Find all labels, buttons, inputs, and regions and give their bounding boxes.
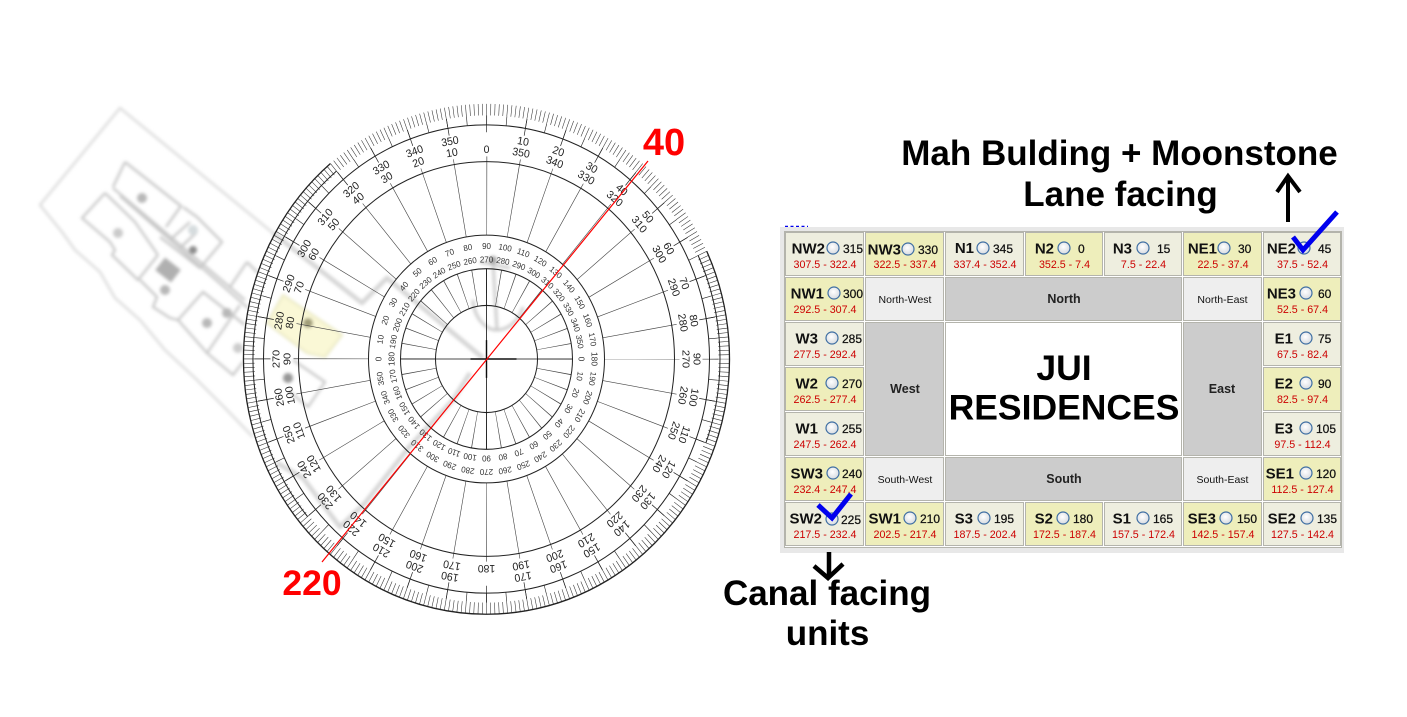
cell: NE3: NE3: [1267, 286, 1296, 302]
protractor degree labels: 340: [544, 154, 565, 172]
cell: S3: 187.5 - 202.4: [954, 529, 1017, 541]
protractor degree labels: 80: [284, 316, 297, 330]
cell: NE3: 60: [1318, 287, 1332, 301]
cell: N3: N3: [1113, 240, 1132, 258]
cell: centre title JUI RESIDENCES: [946, 322, 1182, 456]
cell: NW2: [786, 232, 864, 276]
cell: NE3: 52.5 - 67.4: [1277, 304, 1328, 316]
protractor degree labels: 220: [604, 508, 625, 530]
cell: NW2: 315: [843, 242, 863, 256]
protractor degree labels: 30: [379, 170, 395, 186]
protractor degree labels: 340: [404, 143, 425, 161]
protractor degree labels: 10: [376, 334, 386, 345]
protractor degree labels: 160: [548, 557, 569, 575]
table frame: [780, 227, 1344, 553]
protractor degree labels: 320: [341, 180, 362, 201]
heading: main building and Moonstone Lane facing: Mah Bulding + Moonstone: [901, 134, 1338, 173]
cell: W3: W3: [796, 330, 818, 348]
protractor degree labels: 200: [404, 557, 425, 575]
protractor degree labels: 150: [572, 294, 587, 311]
protractor degree labels: 110: [675, 424, 692, 445]
clipped text at table top: [785, 226, 808, 228]
ten degree ticks: [262, 124, 710, 594]
cell: centre title JUI RESIDENCES: JUI: [1036, 348, 1092, 388]
protractor degree labels: 50: [541, 428, 553, 442]
protractor degree labels: 100: [498, 242, 513, 254]
protractor degree labels: 160: [408, 546, 429, 564]
cell: SE2: 127.5 - 142.4: [1271, 529, 1334, 541]
cell: NW3: [866, 232, 944, 276]
protractor degree labels: 290: [665, 277, 682, 298]
cell: N1: 345: [993, 242, 1013, 256]
protractor degree labels: 200: [391, 317, 404, 333]
cell: NW3: 330: [918, 243, 938, 257]
protractor degree labels: 300: [295, 238, 314, 260]
protractor degree labels: 240: [532, 449, 548, 464]
cell: S2: [1026, 502, 1102, 546]
protractor degree labels: 320: [551, 287, 567, 304]
protractor degree labels: 170: [442, 557, 462, 572]
protractor degree labels: 170: [587, 332, 598, 348]
heading: main building and Moonstone Lane facing: [901, 134, 1338, 214]
five degree ticks: [259, 120, 714, 598]
floor plan highlighted unit: [267, 295, 342, 357]
dense outer rim arcs: [243, 164, 729, 614]
protractor degree labels: 0: [484, 144, 489, 156]
cell: N3: 7.5 - 22.4: [1121, 259, 1166, 271]
cell: E1: 75: [1318, 332, 1332, 346]
protractor degree labels: 60: [427, 255, 439, 268]
protractor degree labels: 230: [547, 437, 563, 454]
protractor degree labels: 10: [516, 135, 530, 149]
protractor degree labels: 30: [583, 160, 599, 176]
protractor degree labels: 240: [295, 458, 314, 480]
cell: W2: 270: [842, 377, 862, 391]
cell: SE1: 112.5 - 127.4: [1271, 484, 1334, 496]
arrow: up to main building: [1277, 176, 1300, 222]
protractor degree labels: 180: [388, 352, 396, 366]
cell: NW3: 322.5 - 337.4: [874, 259, 937, 271]
cell: SE2: 135: [1317, 512, 1337, 526]
protractor degree labels: 210: [371, 540, 392, 560]
cell: SE2: [1264, 502, 1340, 546]
cell: E3: [1264, 412, 1340, 456]
cell: S2: 172.5 - 187.4: [1033, 529, 1096, 541]
label: canal facing units: Canal facing: [723, 574, 931, 613]
cell: NW1: NW1: [791, 286, 824, 302]
cell: NW2: NW2: [792, 240, 825, 258]
protractor degree labels: 220: [407, 287, 422, 304]
centre crosshair: [400, 269, 572, 449]
protractor degree labels: 340: [379, 389, 392, 406]
protractor degree labels: 40: [613, 182, 630, 199]
protractor degree labels: 250: [665, 420, 682, 441]
middle spokes: [331, 196, 642, 522]
cell: SW2: 217.5 - 232.4: [794, 529, 857, 541]
protractor degree labels: 90: [282, 353, 293, 365]
cell: S3: S3: [955, 510, 973, 528]
protractor degree labels: 210: [398, 301, 412, 318]
cell: S3: [946, 502, 1024, 546]
protractor degree labels: 150: [377, 530, 398, 550]
protractor degree labels: 280: [496, 256, 511, 267]
arrow: down to canal facing label: [814, 552, 843, 578]
protractor degree labels: 130: [418, 427, 434, 443]
cell: N1: 337.4 - 352.4: [954, 259, 1017, 271]
protractor degree labels: 40: [398, 280, 411, 293]
protractor degree labels: 250: [515, 458, 531, 472]
protractor degree labels: 230: [418, 275, 434, 291]
protractor degree labels: 310: [629, 214, 649, 236]
cell: South-West: [866, 458, 944, 500]
cell: W1: 247.5 - 262.4: [794, 439, 857, 451]
protractor degree labels: 330: [561, 301, 576, 318]
cell: SW3: 240: [842, 467, 862, 481]
cell: South: [946, 458, 1182, 500]
protractor degree labels: 300: [526, 266, 542, 281]
cell: N3: [1104, 232, 1182, 276]
protractor degree labels: 250: [281, 424, 298, 445]
protractor degree labels: 190: [587, 371, 598, 387]
protractor degree labels: 190: [511, 557, 531, 572]
cell: E2: 82.5 - 97.4: [1277, 394, 1328, 406]
protractor degree labels: 310: [539, 275, 555, 291]
cell: centre title JUI RESIDENCES: RESIDENCES: [949, 388, 1179, 428]
protractor degree labels: 300: [424, 449, 441, 464]
inner spokes: [418, 287, 555, 431]
protractor degree labels: 350: [511, 146, 531, 161]
cell: E3: 97.5 - 112.4: [1274, 439, 1331, 451]
protractor degree labels: 260: [272, 387, 287, 407]
cell: E1: [1264, 322, 1340, 366]
cell: South-West: South-West: [878, 474, 932, 486]
protractor degree labels: 40: [350, 190, 367, 208]
floor plan circular feature near centre: [473, 262, 523, 330]
protractor degree labels: 20: [569, 387, 581, 399]
protractor degree labels: 50: [326, 216, 342, 233]
protractor degree labels: 50: [639, 209, 656, 226]
cell: SW1: [866, 502, 944, 546]
protractor degree labels: 60: [527, 439, 540, 451]
protractor degree labels: 270: [680, 350, 691, 368]
red bearing line: [322, 161, 648, 562]
protractor degree labels: [271, 134, 702, 584]
protractor degree labels: 230: [316, 490, 336, 512]
icon: blue check mark on SW2: [818, 494, 851, 518]
cell: W1: 255: [842, 422, 862, 436]
cell: South-East: South-East: [1197, 474, 1249, 486]
protractor degree labels: 70: [676, 276, 691, 291]
cell: North-East: North-East: [1197, 294, 1248, 306]
protractor degree labels: 120: [659, 458, 678, 480]
protractor degree labels: 200: [581, 389, 594, 406]
cell: S2: 180: [1073, 512, 1093, 526]
cell: S1: 165: [1153, 512, 1173, 526]
protractor degree labels: 0: [577, 357, 585, 362]
protractor degree labels: 290: [281, 273, 298, 294]
cell: W1: W1: [796, 420, 818, 438]
protractor degree labels: 180: [590, 352, 598, 366]
protractor degree labels: 300: [649, 244, 668, 266]
protractor degree labels: 150: [581, 540, 602, 560]
protractor degree labels: 30: [387, 296, 400, 309]
protractor degree labels: 190: [440, 568, 460, 584]
protractor degree labels: 260: [675, 385, 690, 405]
protractor degree labels: 80: [497, 451, 508, 462]
protractor degree labels: 290: [511, 259, 527, 273]
cell: East: East: [1209, 382, 1236, 396]
protractor degree labels: 330: [371, 158, 392, 178]
cell: North-West: North-West: [879, 294, 932, 306]
degree tick band: [249, 110, 724, 608]
cell: E3: E3: [1275, 420, 1293, 438]
protractor degree labels: 220: [561, 423, 576, 440]
protractor degree labels: 240: [431, 265, 448, 281]
protractor degree labels: 100: [686, 387, 701, 407]
cell: East: [1184, 322, 1262, 456]
protractor degree labels: 330: [575, 168, 596, 188]
cell: W3: 277.5 - 292.4: [794, 349, 857, 361]
protractor degree labels: 130: [637, 490, 657, 512]
protractor degree labels: 120: [532, 254, 549, 269]
cell: South-East: [1184, 458, 1262, 500]
protractor degree labels: 210: [575, 530, 596, 550]
protractor degree labels: 280: [675, 313, 690, 333]
cell: NE2: [1264, 232, 1340, 276]
cell: NE2: NE2: [1267, 240, 1296, 258]
protractor degree labels: 220: [341, 517, 362, 538]
cell: SE3: 142.5 - 157.4: [1192, 529, 1255, 541]
floor plan rooms: [82, 162, 325, 407]
bearing label 220: 220: [282, 563, 342, 603]
protractor degree labels: 80: [463, 242, 473, 253]
cell: W1: [786, 412, 864, 456]
protractor degree labels: 250: [446, 259, 462, 273]
protractor degree labels: 310: [316, 206, 336, 228]
protractor degree labels: 140: [611, 517, 632, 538]
cell: N1: N1: [955, 240, 974, 257]
protractor degree labels: 230: [629, 482, 649, 504]
protractor degree labels: 110: [291, 420, 308, 441]
protractor degree labels: 60: [660, 240, 676, 257]
protractor degree labels: 260: [497, 464, 512, 476]
cell: NE2: 45: [1318, 242, 1332, 256]
cell: SW1: 210: [920, 512, 940, 526]
cell: NW1: [786, 278, 864, 320]
protractor degree labels: 20: [551, 144, 566, 160]
cell: NW1: 292.5 - 307.4: [794, 304, 857, 316]
protractor degree labels: 20: [380, 314, 391, 326]
cell: SW1: SW1: [868, 510, 901, 528]
icon: blue check mark on NE2: [1293, 212, 1337, 250]
cell: West: [866, 322, 944, 456]
cell: SW3: [786, 458, 864, 500]
cell: N2: N2: [1035, 240, 1054, 258]
cell: W2: 262.5 - 277.4: [794, 394, 857, 406]
floor plan outer boundary: [40, 108, 273, 437]
cell: W3: [786, 322, 864, 366]
cell: E2: [1264, 368, 1340, 410]
circular protractor compass: [243, 110, 729, 614]
concentric rings: [264, 125, 710, 593]
protractor degree labels: 110: [516, 246, 531, 260]
protractor degree labels: 190: [388, 334, 399, 349]
cell: SE3: SE3: [1188, 510, 1216, 528]
cell: S1: [1104, 502, 1182, 546]
protractor degree labels: 160: [581, 312, 594, 329]
cell: S3: 195: [994, 512, 1014, 526]
protractor degree labels: 100: [283, 385, 298, 405]
cell: N2: [1026, 232, 1102, 276]
cell: South: South: [1046, 472, 1082, 486]
protractor degree labels: 280: [460, 464, 475, 476]
cell: S1: 157.5 - 172.4: [1112, 529, 1175, 541]
cell: E1: E1: [1275, 330, 1293, 348]
protractor degree labels: 140: [348, 508, 369, 530]
protractor degree labels: 140: [561, 278, 577, 295]
cell: SW2: SW2: [789, 510, 822, 528]
protractor degree labels: 320: [604, 188, 625, 210]
protractor degree labels: 270: [479, 467, 493, 476]
cell: North-West: [866, 278, 944, 320]
protractor degree labels: 350: [574, 334, 585, 350]
heading: main building and Moonstone Lane facing: Lane facing: [1023, 175, 1218, 214]
protractor degree labels: 270: [271, 350, 282, 368]
cell: W3: 285: [842, 332, 862, 346]
cell: W2: [786, 368, 864, 410]
cell: North-East: [1184, 278, 1262, 320]
cell: NE2: 37.5 - 52.4: [1277, 259, 1328, 271]
floor plan dark fixtures: [113, 193, 497, 383]
protractor degree labels: 150: [397, 400, 412, 417]
protractor degree labels: 0: [375, 356, 383, 361]
protractor degree labels: 70: [292, 280, 307, 295]
protractor degree labels: 340: [569, 317, 582, 334]
protractor degree labels: 330: [386, 407, 401, 424]
protractor degree labels: 310: [409, 437, 425, 453]
protractor degree labels: 210: [572, 407, 587, 424]
cell: NE1: 30: [1238, 242, 1252, 256]
cell: W2: W2: [796, 376, 818, 392]
cell: North: North: [1047, 292, 1081, 306]
cell: E3: 105: [1316, 422, 1336, 436]
protractor degree labels: 120: [305, 452, 324, 474]
protractor degree labels: 20: [411, 155, 426, 171]
protractor degree labels: 90: [691, 353, 702, 365]
protractor degree labels: 170: [513, 568, 533, 584]
protractor degree labels: 60: [306, 246, 322, 263]
cell: E2: E2: [1275, 376, 1293, 392]
protractor degree labels: 280: [272, 311, 287, 331]
protractor degree labels: 260: [463, 256, 478, 267]
cell: E1: 67.5 - 82.4: [1277, 349, 1328, 361]
floor plan boundary through the compass: [273, 233, 483, 527]
cell: NW2: 307.5 - 322.4: [794, 259, 857, 271]
protractor degree labels: 70: [444, 247, 456, 259]
protractor degree labels: 170: [388, 368, 399, 384]
protractor degree labels: 350: [375, 370, 386, 386]
panel: direction table: [780, 227, 1344, 553]
table base: [784, 232, 1342, 548]
cell: N1: [946, 232, 1024, 276]
protractor degree labels: 290: [442, 458, 458, 472]
cell: N2: 0: [1078, 242, 1085, 256]
cell: SW3: 232.4 - 247.4: [794, 484, 857, 496]
cell: NE3: [1264, 278, 1340, 320]
cell: SW2: 225: [841, 513, 861, 527]
protractor degree labels: 90: [482, 454, 491, 463]
cell: NE1: NE1: [1188, 240, 1217, 258]
protractor degree labels: 350: [440, 134, 460, 150]
protractor degree labels: 240: [649, 452, 668, 474]
cell: SE2: SE2: [1268, 510, 1296, 528]
protractor degree labels: 90: [482, 242, 491, 251]
cell: N3: 15: [1157, 242, 1171, 256]
protractor degree labels: 100: [462, 451, 477, 462]
protractor degree labels: 130: [548, 265, 564, 281]
cell: S1: S1: [1113, 510, 1131, 528]
protractor degree labels: 160: [391, 384, 404, 401]
cell: N2: 352.5 - 7.4: [1039, 259, 1090, 271]
cell: SE1: [1264, 458, 1340, 500]
blurred floor plan: [40, 108, 523, 527]
protractor degree labels: 80: [686, 314, 700, 328]
cell: SE1: 120: [1316, 467, 1336, 481]
cell: SE3: [1184, 502, 1262, 546]
protractor degree labels: 10: [445, 146, 459, 160]
cell: E2: 90: [1318, 377, 1332, 391]
cell: NW3: NW3: [868, 242, 901, 258]
cell: NW1: 300: [843, 287, 863, 301]
label: canal facing units: units: [786, 614, 869, 653]
cell: West: West: [890, 382, 921, 396]
cell: NE1: [1184, 232, 1262, 276]
protractor degree labels: 110: [446, 445, 462, 459]
cell: SW1: 202.5 - 217.4: [874, 529, 937, 541]
protractor degree labels: 30: [562, 402, 574, 415]
cell: SE1: SE1: [1266, 466, 1294, 482]
protractor degree labels: 130: [324, 482, 344, 504]
protractor degree labels: 180: [478, 562, 495, 574]
protractor degree labels: 140: [406, 414, 422, 431]
cell: NE1: 22.5 - 37.4: [1197, 259, 1249, 271]
protractor degree labels: 40: [552, 416, 565, 430]
cell: SW2: [786, 502, 864, 546]
protractor degree labels: 270: [480, 255, 494, 264]
label: canal facing units: [723, 574, 931, 653]
cell: SW3: SW3: [790, 466, 823, 482]
cell: North: [946, 278, 1182, 320]
protractor degree labels: 70: [513, 446, 524, 458]
protractor degree labels: 50: [411, 266, 424, 279]
protractor degree labels: 10: [574, 371, 585, 382]
cell: SE3: 150: [1237, 512, 1257, 526]
protractor degree labels: 320: [396, 423, 412, 440]
bearing label 40: 40: [643, 122, 685, 164]
protractor degree labels: 120: [431, 437, 447, 452]
protractor degree labels: 200: [544, 546, 565, 564]
cell: S2: S2: [1035, 510, 1053, 528]
